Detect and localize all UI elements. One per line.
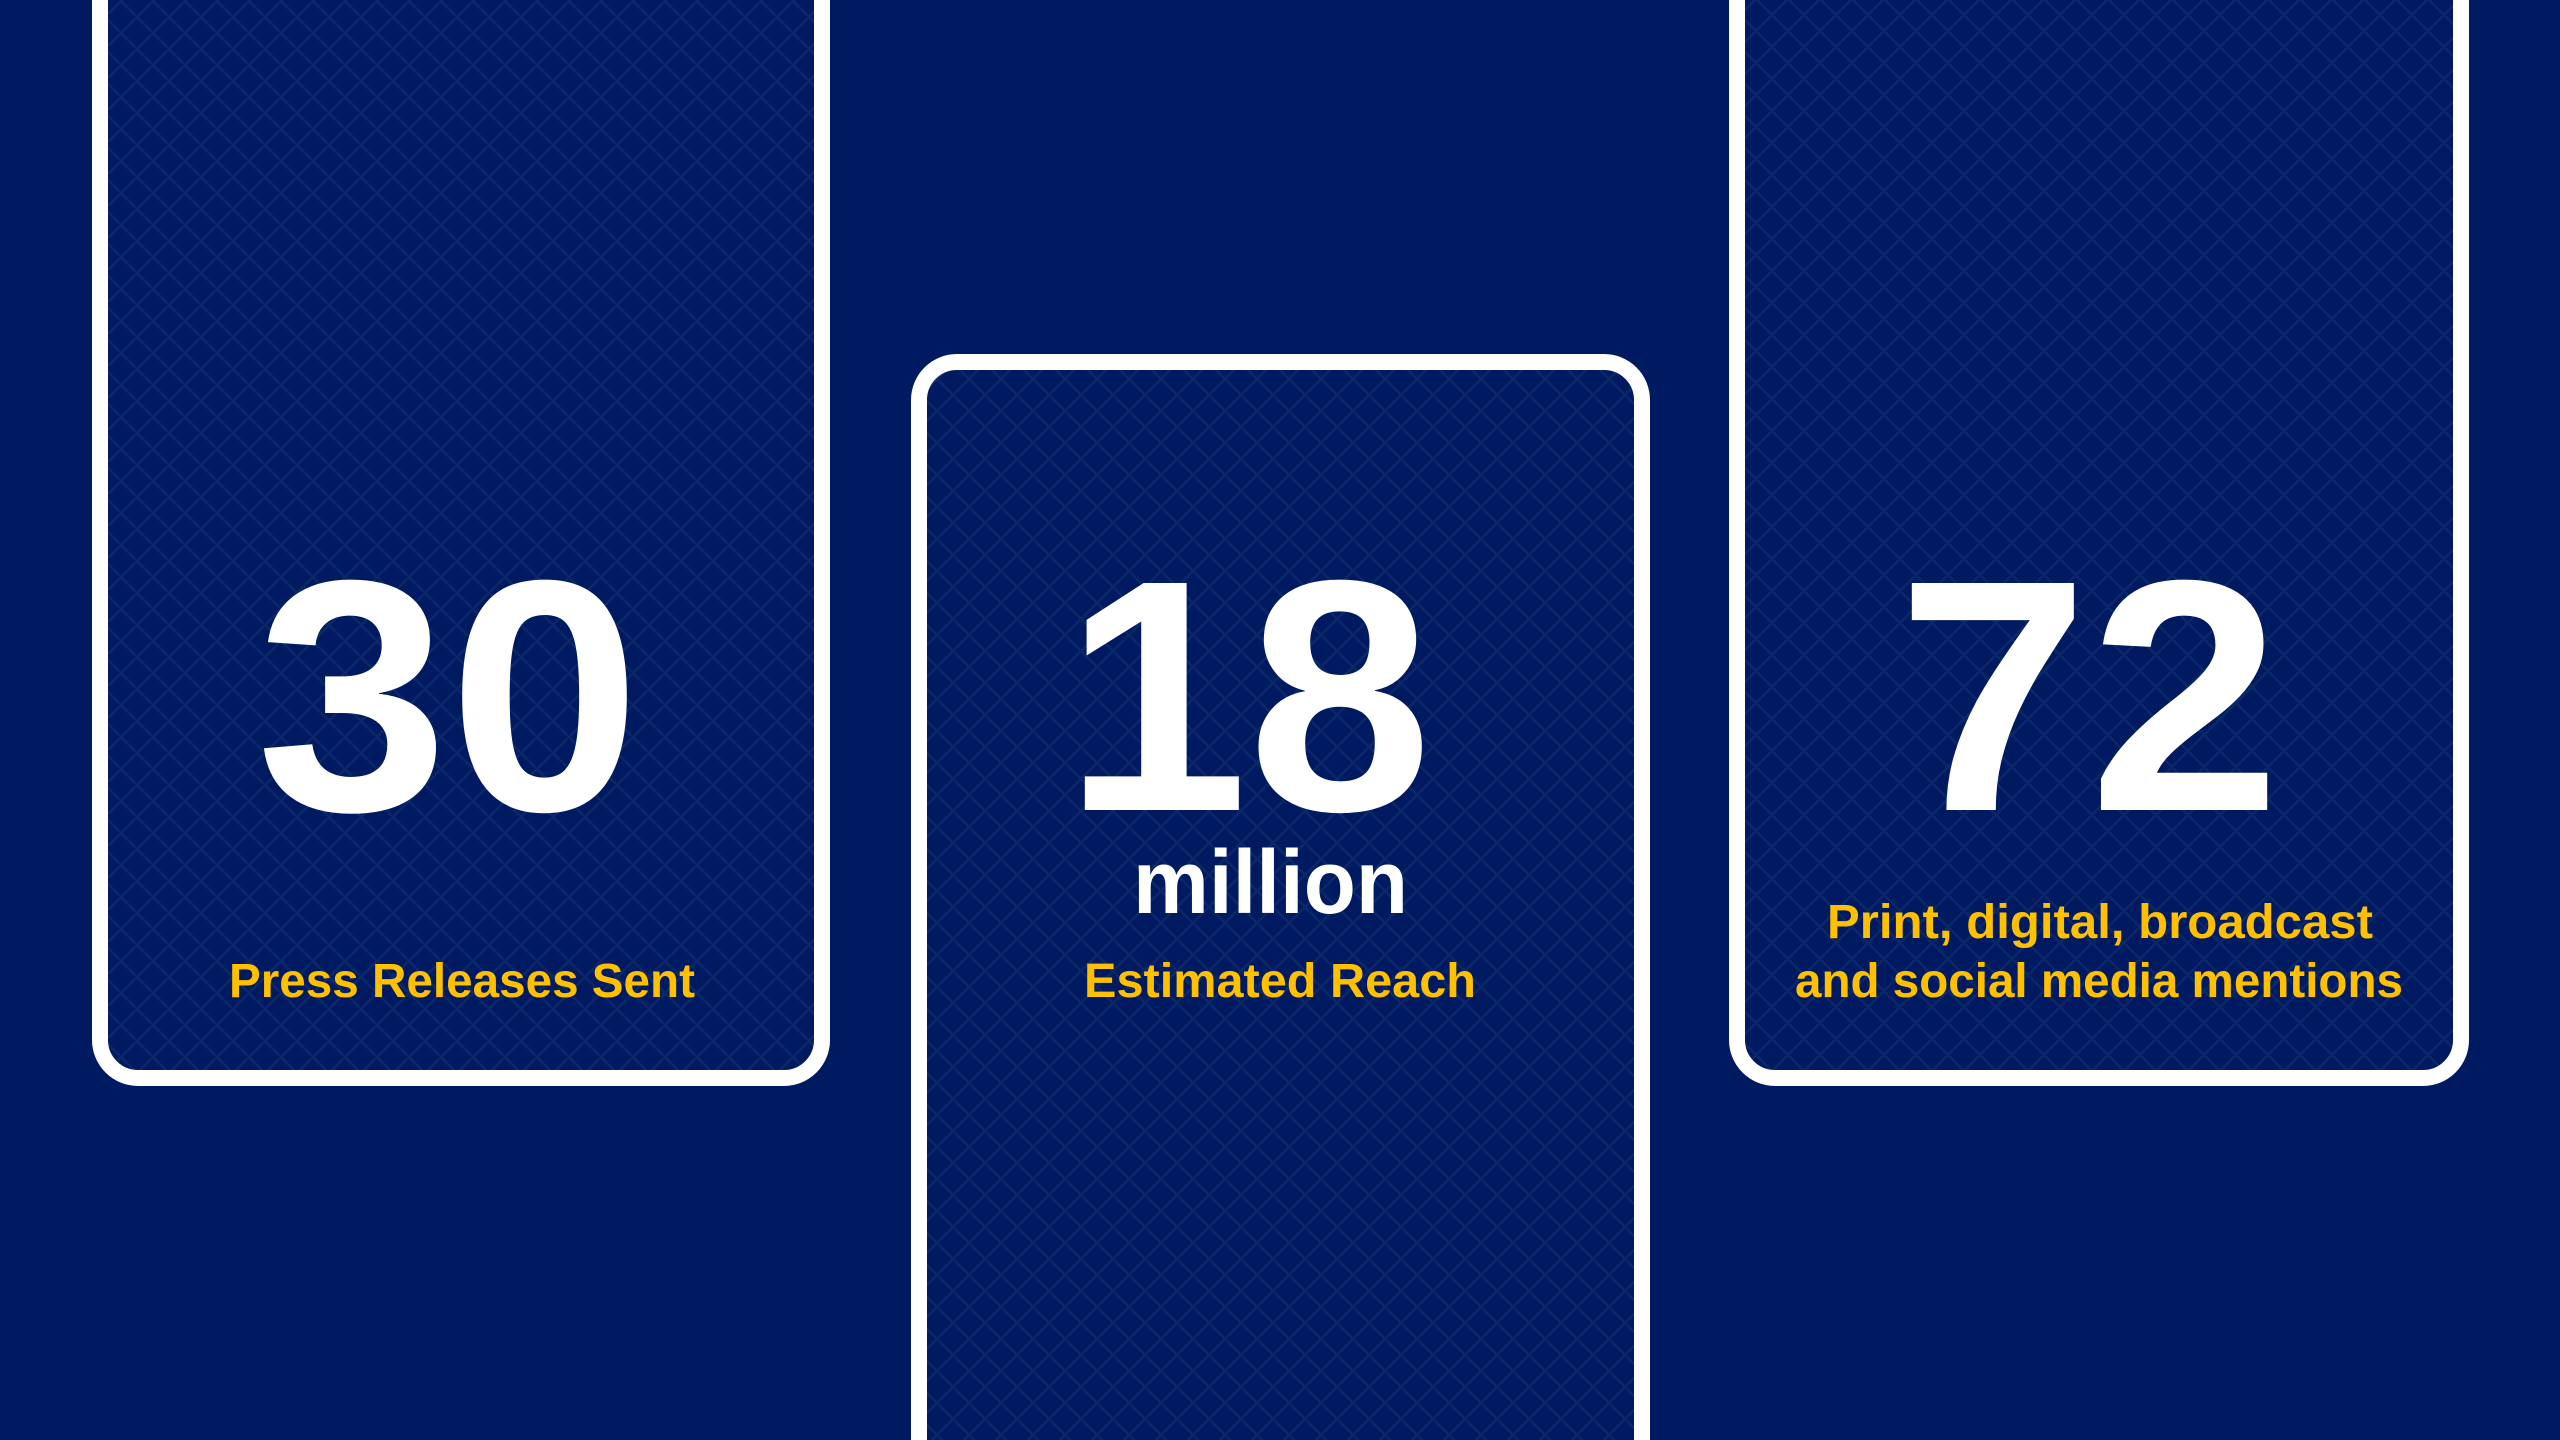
panel: estimated reach — [919, 362, 1642, 1440]
label: media mentions — [1795, 896, 2403, 1008]
number: 18: 18 — [1064, 511, 1432, 880]
card frame: estimated reach — [919, 362, 1642, 1440]
unit: million: million — [1133, 833, 1408, 933]
number: 30: 30 — [256, 511, 641, 880]
label: media mentions: and social media mentions — [1795, 955, 2403, 1008]
card frame: media mentions — [1737, 0, 2461, 1078]
label: estimated reach: Estimated Reach — [1084, 955, 1476, 1008]
card frame: press releases — [100, 0, 822, 1078]
panel: media mentions — [1737, 0, 2461, 1078]
label: media mentions: Print, digital, broadcast — [1827, 896, 2373, 949]
panel: press releases — [100, 0, 822, 1078]
label: press releases sent: Press Releases Sent — [229, 955, 695, 1008]
number: 72: 72 — [1897, 511, 2281, 880]
